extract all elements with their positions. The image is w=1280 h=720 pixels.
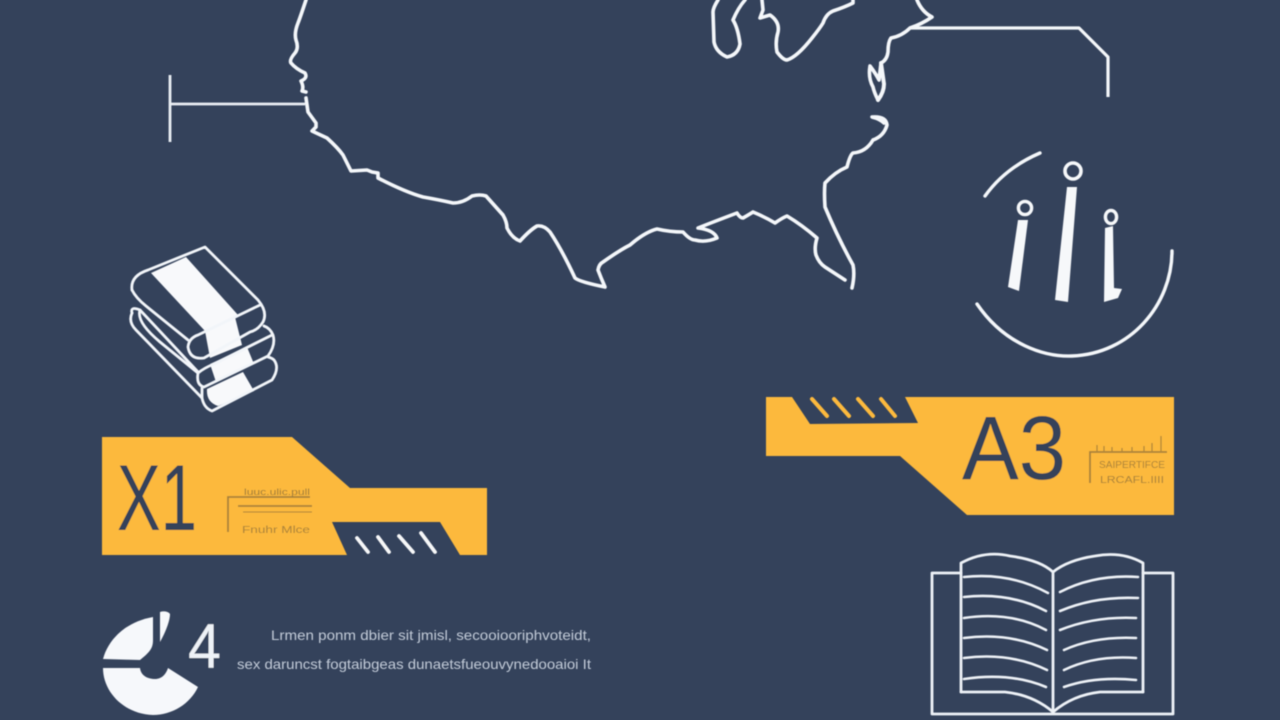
banner two label <box>1090 436 1167 486</box>
connector: west leader line <box>170 75 305 142</box>
banner one code: X1 <box>117 445 197 550</box>
map: United States coastline outline <box>290 0 932 288</box>
banner one stripes <box>357 533 435 552</box>
banner one label: Fnuhr Mlce <box>242 525 311 536</box>
banner one label <box>228 487 312 536</box>
step number: 4 <box>188 612 221 682</box>
connector: east leader line <box>910 28 1108 97</box>
banner two code: A3 <box>962 399 1066 499</box>
icon: open book <box>932 554 1173 714</box>
panel: yellow banner two <box>766 397 1174 515</box>
banner two stripes <box>812 399 895 416</box>
icon: stack of rolled towels or books <box>131 247 277 411</box>
panel: yellow banner one <box>102 437 487 555</box>
banner two label: SAIPERTIFCE <box>1099 460 1165 471</box>
banner one label: luuc.ulic.pull <box>244 487 310 497</box>
text block: description <box>237 627 591 672</box>
text block: description: sex daruncst fogtaibgeas dunaetsfueouvynedooaioi It <box>237 656 591 672</box>
text block: description: Lrmen ponm dbier sit jmisl, secooiooriphvoteidt, <box>271 627 591 643</box>
banner two label: LRCAFL.IIII <box>1100 475 1164 486</box>
icon: bar chart in circle <box>977 153 1172 356</box>
icon: pie chart <box>103 611 198 715</box>
book page lines <box>964 576 1138 687</box>
